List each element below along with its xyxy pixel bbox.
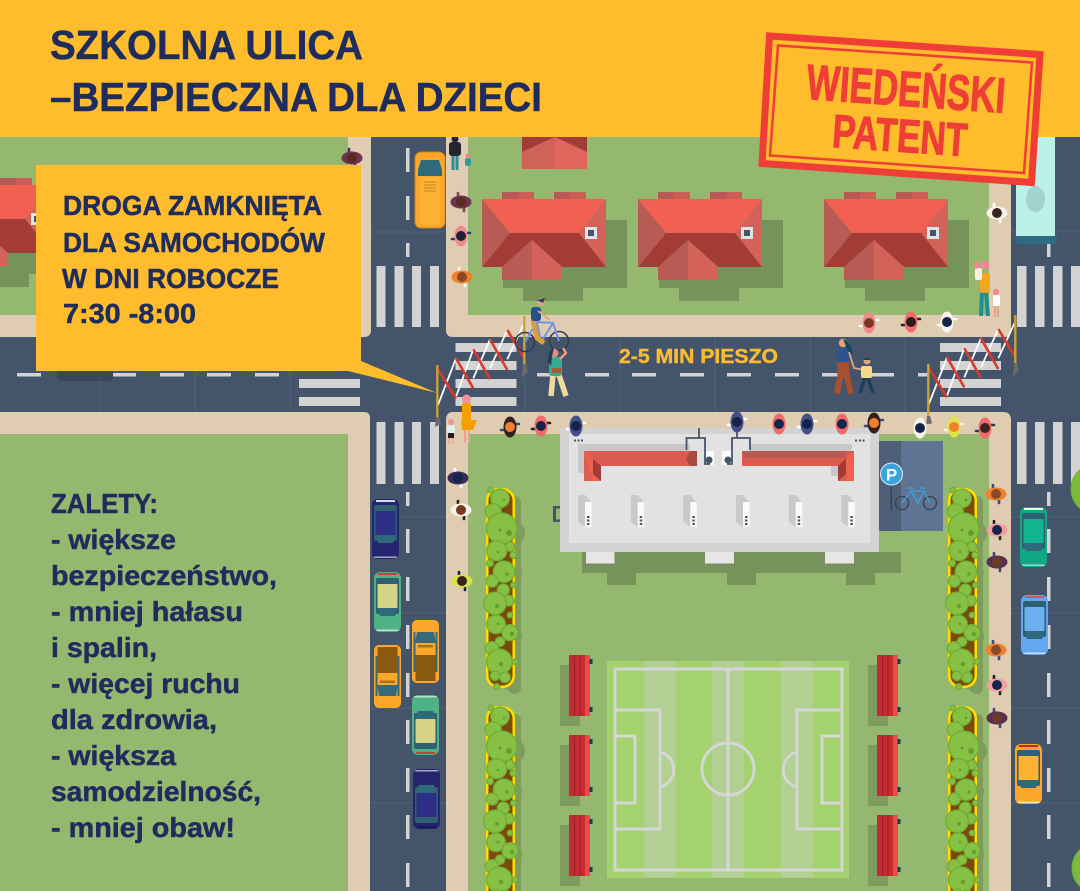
text block: benefits: - więcej ruchu — [51, 668, 240, 699]
lane dashes — [17, 148, 1050, 887]
title: SZKOLNA ULICA — [50, 22, 363, 68]
road seams — [100, 231, 1080, 803]
red roof right — [742, 451, 854, 481]
roof pipes and units — [686, 428, 750, 465]
crosswalks — [299, 266, 1080, 484]
roof — [560, 428, 879, 552]
yellow van — [415, 152, 445, 228]
road label: 2-5 MIN PIESZO — [619, 346, 778, 368]
text block: benefits: - mniej obaw! — [51, 812, 235, 843]
houses — [0, 137, 969, 301]
text block: benefits: samodzielność, — [51, 776, 261, 807]
title — [50, 22, 542, 120]
callout: road closure: DLA SAMOCHODÓW — [63, 227, 326, 258]
school building — [553, 428, 901, 585]
title: –BEZPIECZNA DLA DZIECI — [50, 74, 542, 120]
callout: road closure — [36, 165, 437, 393]
text block: benefits: - większe — [51, 524, 176, 555]
partial house at top edge — [522, 137, 587, 169]
bike parking — [879, 441, 943, 531]
building feet — [586, 552, 854, 564]
side entrances — [553, 506, 560, 522]
text block: benefits: dla zdrowia, — [51, 704, 217, 735]
pedestrians seen from above — [342, 149, 1008, 727]
parking sign: P — [886, 466, 897, 484]
bus — [1015, 130, 1057, 244]
stamp: Wiedeński patent: PATENT — [831, 104, 969, 166]
roof vents — [578, 495, 855, 527]
sidewalks — [0, 137, 1011, 891]
woman waving — [548, 348, 566, 396]
parked bicycle — [896, 488, 936, 510]
text block: benefits: ZALETY: — [51, 488, 158, 519]
family at top of left pavement — [449, 136, 471, 170]
red roof left — [584, 451, 697, 481]
building shadow — [582, 552, 901, 585]
car shadow under callout — [57, 371, 113, 381]
woman and child crossing — [837, 339, 873, 394]
text block: benefits: i spalin, — [51, 632, 157, 663]
callout: road closure: W DNI ROBOCZE — [62, 263, 279, 294]
text block: benefits — [51, 488, 277, 843]
header band — [0, 0, 1080, 137]
football pitch — [607, 661, 849, 878]
stamp: Wiedeński patent — [759, 33, 1043, 186]
woman and child near left barrier — [447, 394, 477, 444]
callout: road closure: DROGA ZAMKNIĘTA — [63, 190, 322, 221]
text block: benefits: - większa — [51, 740, 176, 771]
benches — [560, 655, 900, 886]
family on right corner — [974, 260, 1000, 317]
roadside trees at right edge — [1071, 464, 1080, 891]
hedges — [484, 487, 987, 891]
cars — [372, 130, 1057, 829]
text block: benefits: bezpieczeństwo, — [51, 560, 277, 591]
road barriers — [435, 315, 1019, 427]
callout: road closure: 7:30 -8:00 — [63, 298, 196, 329]
cyclist — [516, 298, 568, 352]
text block: benefits: - mniej hałasu — [51, 596, 243, 627]
